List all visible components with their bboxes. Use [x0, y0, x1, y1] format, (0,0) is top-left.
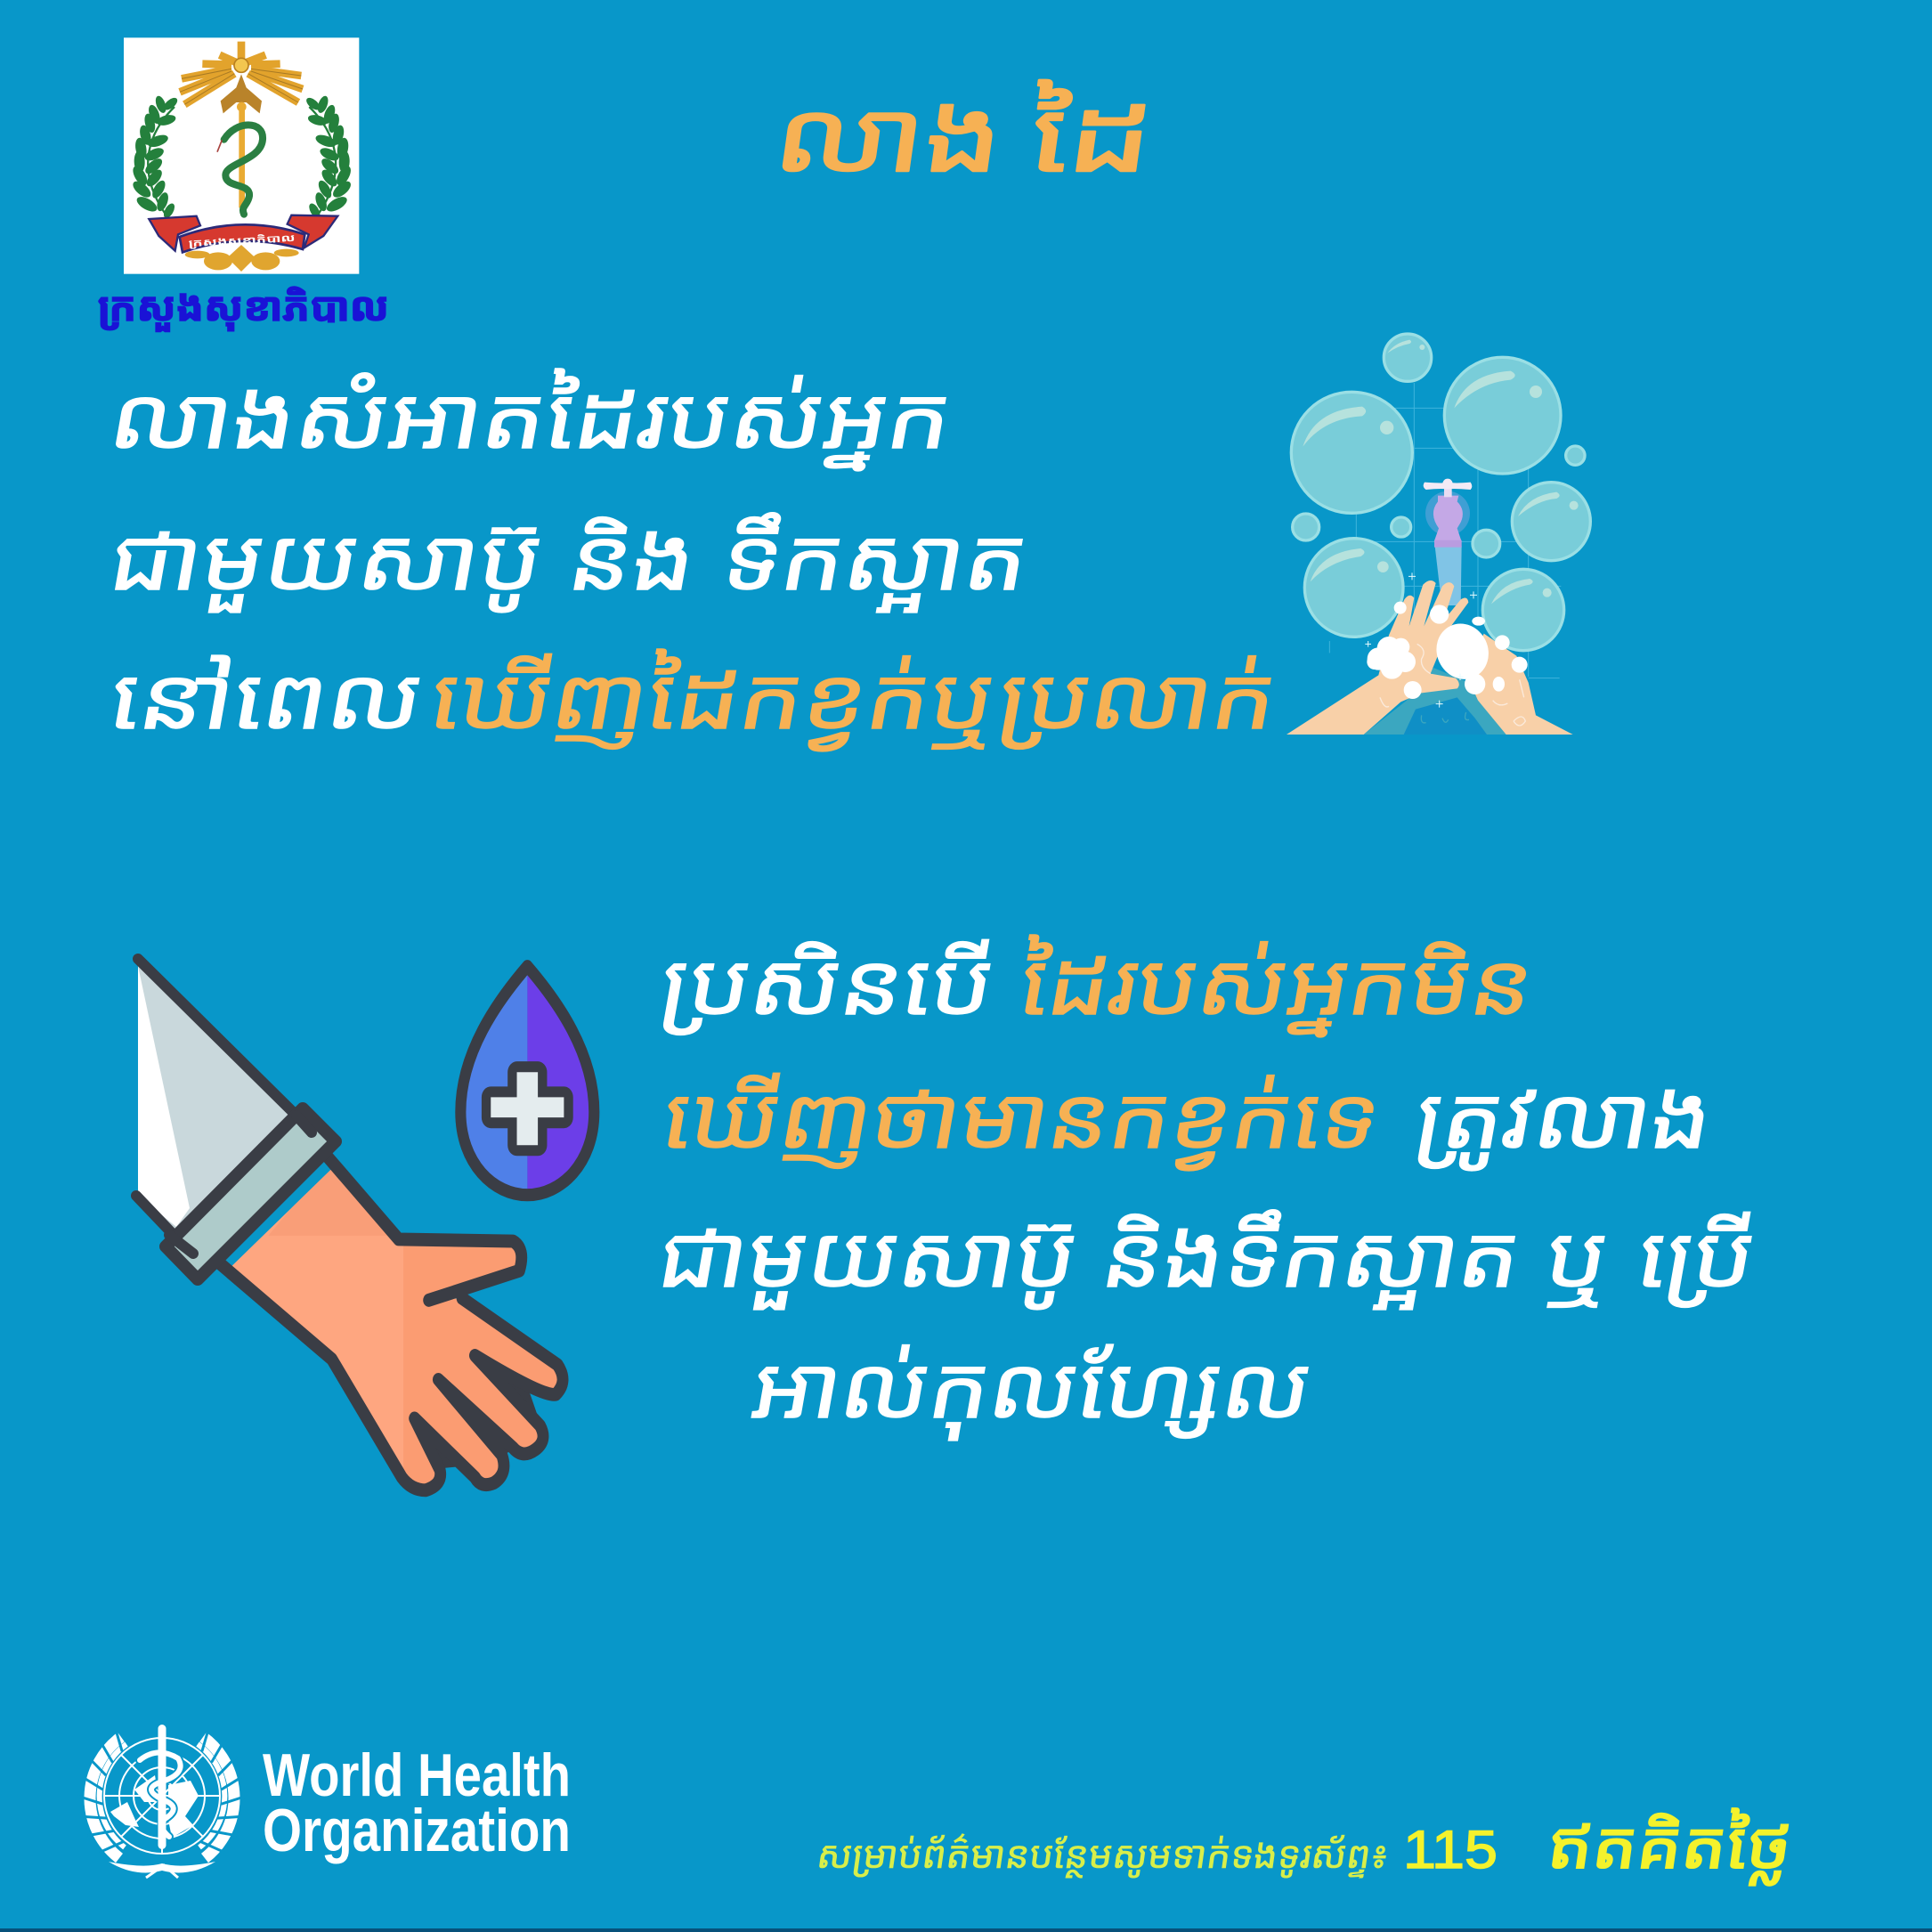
WHO right wreath	[193, 1725, 247, 1860]
left laurel branch	[130, 94, 180, 220]
second line: Organization	[263, 1797, 571, 1864]
illustration: hand with sleeve	[136, 959, 594, 1496]
line 3 lead-in: នៅពេល	[102, 651, 431, 747]
text: World Health Organization	[263, 1741, 571, 1864]
illustration: hands washing under tap with bubbles	[1287, 334, 1590, 735]
line 3 highlight: ឃើញដៃកខ្វក់ឬប្រលាក់	[422, 648, 1286, 751]
line 2 highlight: ឃើញថាមានកខ្វក់ទេ	[654, 1070, 1387, 1171]
line 2: ជាមួយសាប៊ូ និង ទឹកស្អាត	[101, 511, 1036, 613]
line 4: អាល់កុលហ្សែល	[743, 1340, 1319, 1441]
hotline label: សម្រាប់ព័ត៌មានបន្ថែមសូមទាក់ទងទូរស័ព្ទ៖	[814, 1832, 1392, 1879]
sleeve	[138, 963, 294, 1231]
first line: World Health	[263, 1741, 571, 1809]
cuff	[166, 1108, 336, 1279]
line 3: ជាមួយសាប៊ូ និងទឹកស្អាត ឬ ប្រើ	[650, 1208, 1763, 1310]
water stream	[1435, 546, 1462, 605]
line 1 lead-in: ប្រសិនបើ	[653, 937, 1002, 1035]
WHO left wreath	[77, 1725, 131, 1860]
logo: Ministry of Health emblem: ក្រសួងសុខាភិបាល	[188, 231, 296, 249]
logo: WHO emblem	[77, 1725, 247, 1878]
soap bubbles	[1291, 334, 1590, 651]
hotline number: 115	[1403, 1820, 1498, 1879]
line 2 ending: ត្រូវលាង	[1407, 1070, 1720, 1171]
icon: water drop with plus	[460, 966, 594, 1195]
footer: hotline	[814, 1807, 1798, 1886]
title word: wash: លាង	[768, 83, 1011, 192]
line 1 highlight: ដៃរបស់អ្នកមិន	[1011, 934, 1542, 1037]
hand skin lines	[1380, 644, 1525, 726]
title word: hand: ដៃ	[1024, 80, 1160, 192]
logo: Ministry of Health emblem	[124, 37, 359, 274]
line 1: លាងសំអាតដៃរបស់អ្នក	[101, 368, 961, 471]
right laurel branch	[304, 94, 353, 220]
sparkles	[1365, 572, 1477, 708]
tap	[1424, 479, 1472, 548]
text block: wash hands with soap and water	[101, 368, 1286, 751]
pooling water	[1364, 668, 1507, 735]
title	[768, 80, 1160, 192]
left hand	[1287, 580, 1468, 735]
logo caption: Ministry of Health: ក្រសួងសុខាភិបាល	[98, 286, 389, 331]
hand	[217, 1155, 594, 1496]
foam	[1367, 602, 1528, 699]
free of charge: ឥតគិតថ្លៃ	[1543, 1807, 1798, 1886]
text block: if hands are not visibly dirty	[650, 934, 1763, 1441]
right hand	[1466, 634, 1573, 735]
